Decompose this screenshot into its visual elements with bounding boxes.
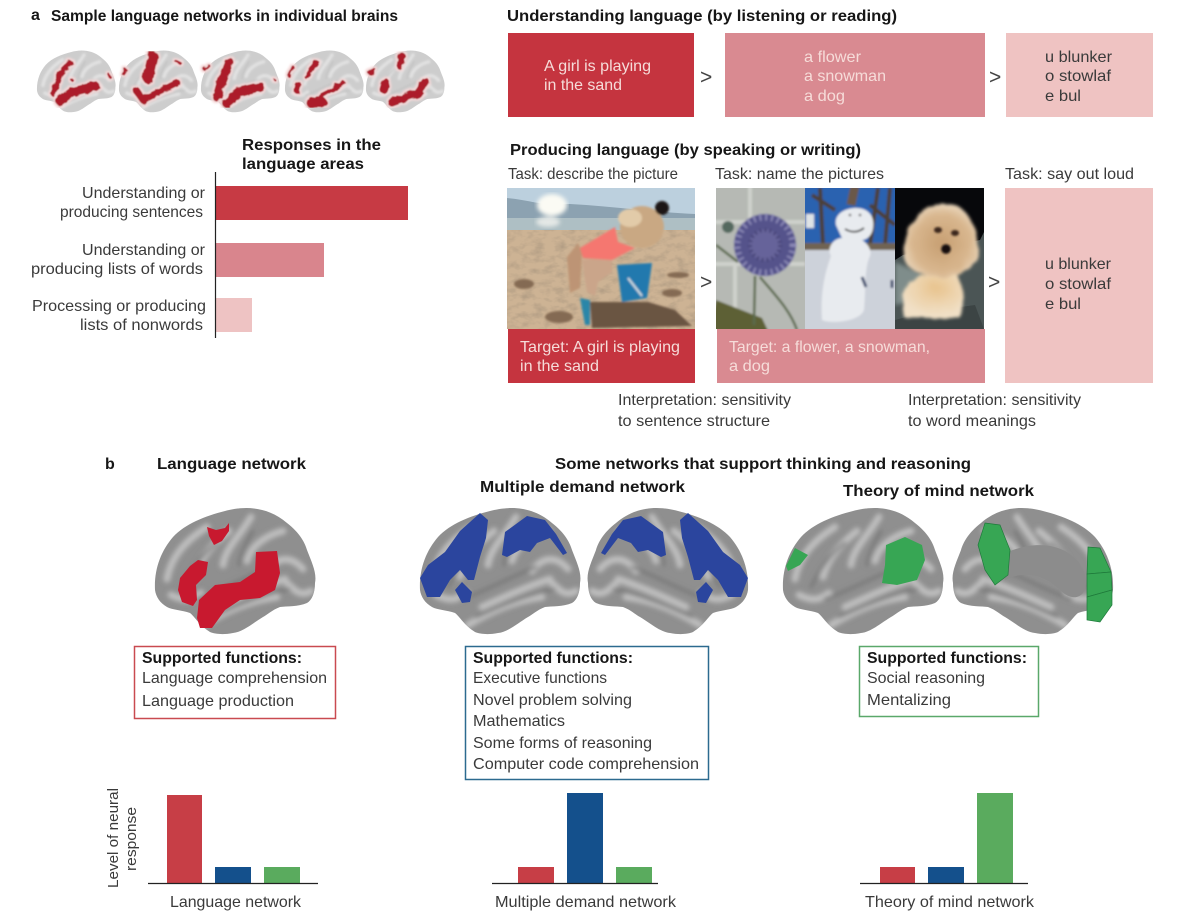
task labels: Task: name the pictures (715, 166, 884, 183)
box: supported theory of mind functions: Mentalizing (867, 692, 951, 709)
icon: brain with language regions (150, 502, 320, 638)
box: target sentence (508, 329, 695, 383)
bar chart: language network response (148, 795, 318, 911)
heading: understanding language: Understanding language (by listening or reading) (507, 8, 897, 25)
icon: medial brain with green regions (948, 502, 1118, 638)
box: nonword stimulus: e bul (1045, 88, 1081, 105)
box: supported theory of mind functions (860, 646, 1038, 716)
heading: theory of mind network: Theory of mind network (843, 483, 1034, 500)
panel: understanding language (507, 8, 1153, 117)
photo: dog (895, 188, 984, 329)
box: nonword stimulus: u blunker (1045, 49, 1113, 66)
heading: language network: Language network (157, 456, 306, 473)
box: word list stimulus: a snowman (804, 68, 886, 85)
bar chart: language network response: Language network (170, 894, 302, 911)
box: target words: Target: a flower, a snowman, (729, 339, 930, 356)
heading: thinking and reasoning networks: Some networks that support thinking and reasoning (555, 456, 971, 473)
bar: sentences: producing sentences (60, 204, 203, 221)
interpretation: sentence structure: Interpretation: sensitivity (618, 392, 791, 409)
axis label: level of neural response: response (123, 807, 140, 871)
heading: multiple demand network: Multiple demand network (480, 479, 685, 496)
box: supported multiple demand functions: Novel problem solving (473, 692, 632, 709)
box: say nonwords (1005, 188, 1153, 383)
arrow: greater than: > (700, 271, 712, 294)
heading: sample language networks: Sample language networks in individual brains (51, 8, 398, 25)
bar: nonwords: lists of nonwords (80, 317, 203, 334)
box: say nonwords: u blunker (1045, 256, 1112, 273)
chart title: Responses in the (242, 137, 381, 154)
box: sentence stimulus: in the sand (544, 77, 622, 94)
interpretation: word meanings: Interpretation: sensitivity (908, 392, 1081, 409)
box: nonword stimulus: o stowlaf (1045, 68, 1112, 85)
bar: nonwords: Processing or producing (32, 298, 206, 315)
icon: five individual brains (35, 48, 447, 114)
box: word list stimulus: a dog (804, 88, 845, 105)
bar: word lists: producing lists of words (31, 261, 203, 278)
chart title (242, 137, 381, 173)
box: sentence stimulus: A girl is playing (544, 58, 651, 75)
bar chart: multiple demand response: Multiple demand network (495, 894, 677, 911)
heading: sample language networks: a (31, 7, 40, 24)
panel: producing language (507, 142, 1153, 430)
box: supported theory of mind functions: Social reasoning (867, 670, 985, 687)
bar chart: theory of mind response: Theory of mind network (865, 894, 1035, 911)
box: word list stimulus: a flower (804, 49, 862, 66)
photo: girl playing in sand (507, 188, 695, 329)
icon: lateral brain with green regions (778, 502, 948, 638)
bar chart: responses in language areas (31, 137, 408, 338)
photo: flower (710, 180, 810, 335)
interpretation: word meanings: to word meanings (908, 413, 1036, 430)
bar chart: multiple demand response (492, 793, 677, 911)
icon: brain left with blue regions (415, 502, 585, 638)
bar: word lists (31, 242, 324, 278)
box: supported language functions: Language production (142, 693, 294, 710)
box: target words (717, 329, 985, 383)
box: target sentence: Target: A girl is playing (520, 339, 680, 356)
photo: snowman (800, 180, 900, 335)
arrow: greater than: > (989, 66, 1001, 89)
box: nonword stimulus (1006, 33, 1153, 117)
panel a: sample brains (31, 7, 447, 114)
heading: producing language: Producing language (by speaking or writing) (510, 142, 861, 159)
chart title: language areas (242, 156, 364, 173)
box: supported multiple demand functions: Supported functions: (473, 650, 633, 667)
box: target sentence: in the sand (520, 358, 599, 375)
bar: nonwords (32, 298, 252, 334)
box: say nonwords: o stowlaf (1045, 276, 1112, 293)
box: supported language functions: Supported functions: (142, 650, 302, 667)
box: target words: a dog (729, 358, 770, 375)
interpretation: sentence structure (618, 392, 791, 430)
box: word list stimulus (725, 33, 985, 117)
panel: multiple demand network (415, 479, 753, 911)
arrow: greater than: > (700, 66, 712, 89)
box: supported theory of mind functions: Supported functions: (867, 650, 1027, 667)
box: supported multiple demand functions (466, 646, 708, 780)
bar: word lists: Understanding or (82, 242, 206, 259)
box: say nonwords: e bul (1045, 296, 1081, 313)
bar: sentences: Understanding or (82, 185, 206, 202)
box: supported multiple demand functions: Computer code comprehension (473, 756, 699, 773)
heading: language network: b (105, 456, 115, 473)
interpretation: sentence structure: to sentence structure (618, 413, 770, 430)
interpretation: word meanings (908, 392, 1081, 430)
task labels: Task: say out loud (1005, 166, 1134, 183)
bar chart: theory of mind response (860, 793, 1035, 911)
task labels: Task: describe the picture (508, 166, 678, 183)
box: supported multiple demand functions: Some forms of reasoning (473, 735, 652, 752)
panel b: language network (105, 456, 336, 911)
axis label: level of neural response (105, 788, 140, 888)
panel: theory of mind network (778, 483, 1118, 911)
box: supported language functions: Language comprehension (142, 670, 327, 687)
arrow: greater than: > (988, 271, 1000, 294)
icon: brain right with blue regions (583, 502, 753, 638)
task labels (508, 166, 1134, 183)
box: supported language functions (134, 646, 336, 718)
box: supported multiple demand functions: Mathematics (473, 713, 565, 730)
bar: sentences (60, 185, 408, 221)
box: sentence stimulus (508, 33, 694, 117)
box: supported multiple demand functions: Executive functions (473, 670, 607, 687)
axis label: level of neural response: Level of neural (105, 788, 122, 888)
